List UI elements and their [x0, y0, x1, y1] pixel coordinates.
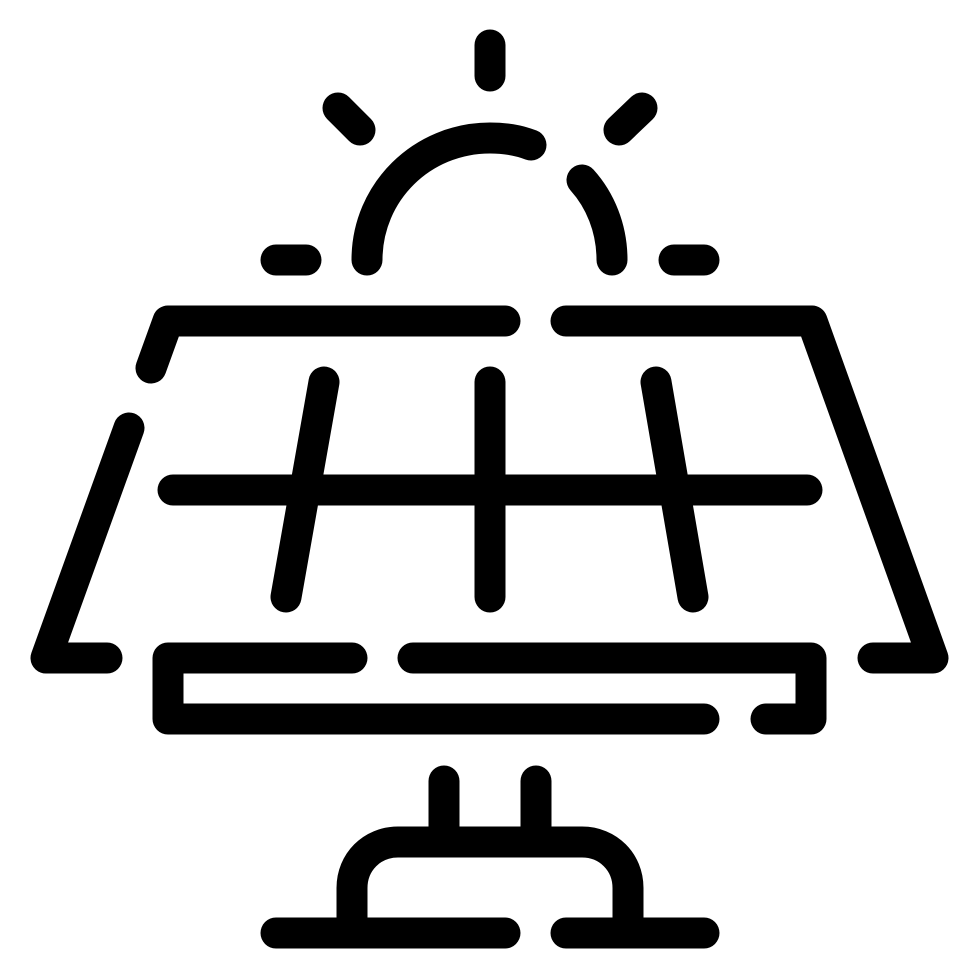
icon: sun arc — [367, 138, 612, 260]
panel: lower bar — [168, 658, 811, 719]
icon: stand — [276, 781, 704, 933]
panel: grid lines — [173, 382, 807, 597]
icon: sun rays — [276, 45, 704, 260]
panel: outer frame — [46, 321, 933, 658]
